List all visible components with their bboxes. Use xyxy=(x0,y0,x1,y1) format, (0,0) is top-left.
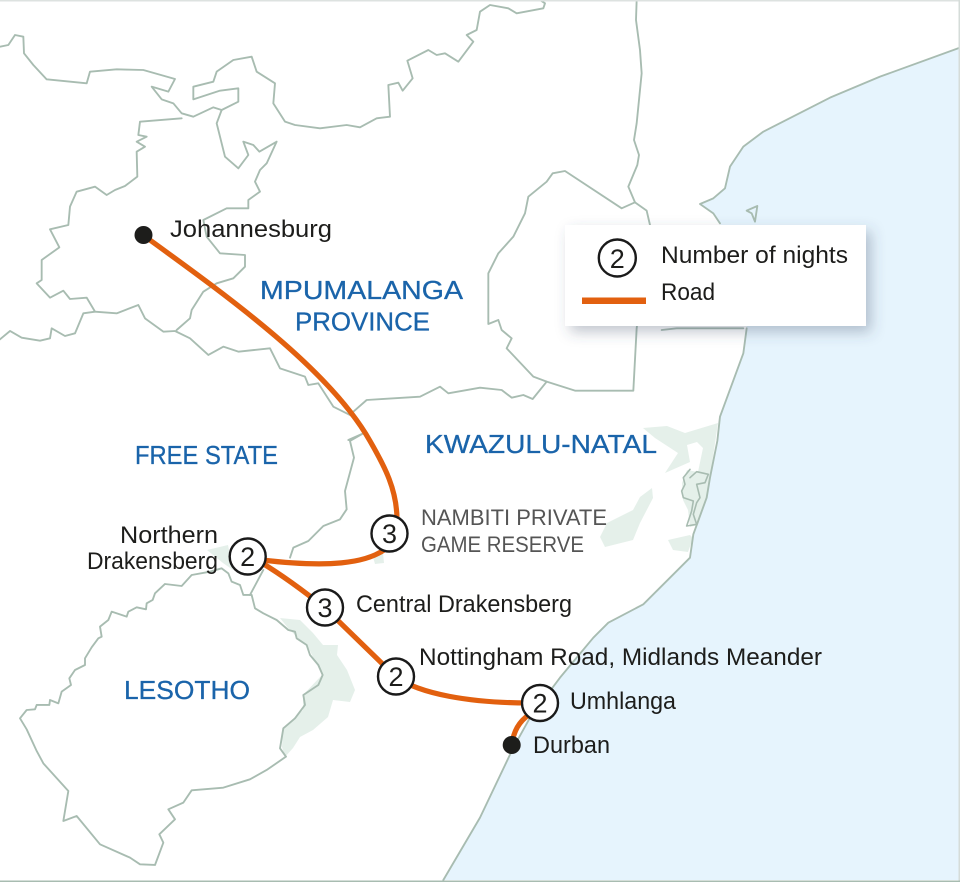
marker: Central Drakensberg 3 nights: 3 xyxy=(317,593,333,623)
label: Mpumalanga Province: PROVINCE xyxy=(295,306,430,336)
marker: Durban dot xyxy=(503,736,521,754)
marker: Umhlanga 2 nights xyxy=(522,685,558,721)
legend text: road: Road xyxy=(661,279,715,306)
label: Nambiti Private Game Reserve xyxy=(421,505,607,557)
legend icon: nights circle xyxy=(599,240,636,276)
label: Lesotho: LESOTHO xyxy=(124,675,250,705)
marker: Nottingham Road 2 nights: 2 xyxy=(388,662,404,692)
sea xyxy=(443,48,960,880)
marker: Central Drakensberg 3 nights xyxy=(307,590,343,626)
marker: Nambiti 3 nights: 3 xyxy=(382,519,397,549)
label: Nambiti Private Game Reserve: GAME RESERVE xyxy=(421,532,584,557)
label: Nottingham Road, Midlands Meander: Nottingham Road, Midlands Meander xyxy=(419,644,822,671)
label: Northern Drakensberg: Northern xyxy=(120,522,218,549)
legend icon: road line xyxy=(582,298,646,304)
marker: Nottingham Road 2 nights xyxy=(378,658,414,694)
legend icon: nights circle: 2 xyxy=(610,244,625,274)
marker: Johannesburg dot xyxy=(134,226,152,244)
marker: Nambiti 3 nights xyxy=(372,516,408,552)
protected green areas xyxy=(207,423,718,757)
label: Free State: FREE STATE xyxy=(135,440,278,470)
route: road line xyxy=(143,235,530,745)
label: Central Drakensberg: Central Drakensberg xyxy=(356,591,572,618)
legend xyxy=(565,225,866,326)
label: Umhlanga: Umhlanga xyxy=(570,688,677,715)
marker: Northern Drakensberg 2 nights: 2 xyxy=(240,542,255,572)
label: KwaZulu-Natal: KWAZULU-NATAL xyxy=(425,429,657,459)
label: Durban: Durban xyxy=(533,732,610,759)
marker: Umhlanga 2 nights: 2 xyxy=(532,688,548,718)
marker: Northern Drakensberg 2 nights xyxy=(230,538,266,574)
legend text: number of nights: Number of nights xyxy=(661,242,848,269)
label: Nambiti Private Game Reserve: NAMBITI PRIVATE xyxy=(421,505,607,530)
label: Mpumalanga Province: MPUMALANGA xyxy=(260,275,464,305)
label: Johannesburg: Johannesburg xyxy=(170,216,332,243)
label: Northern Drakensberg: Drakensberg xyxy=(87,548,218,575)
label: Mpumalanga Province xyxy=(260,275,464,336)
label: Northern Drakensberg xyxy=(87,522,218,575)
